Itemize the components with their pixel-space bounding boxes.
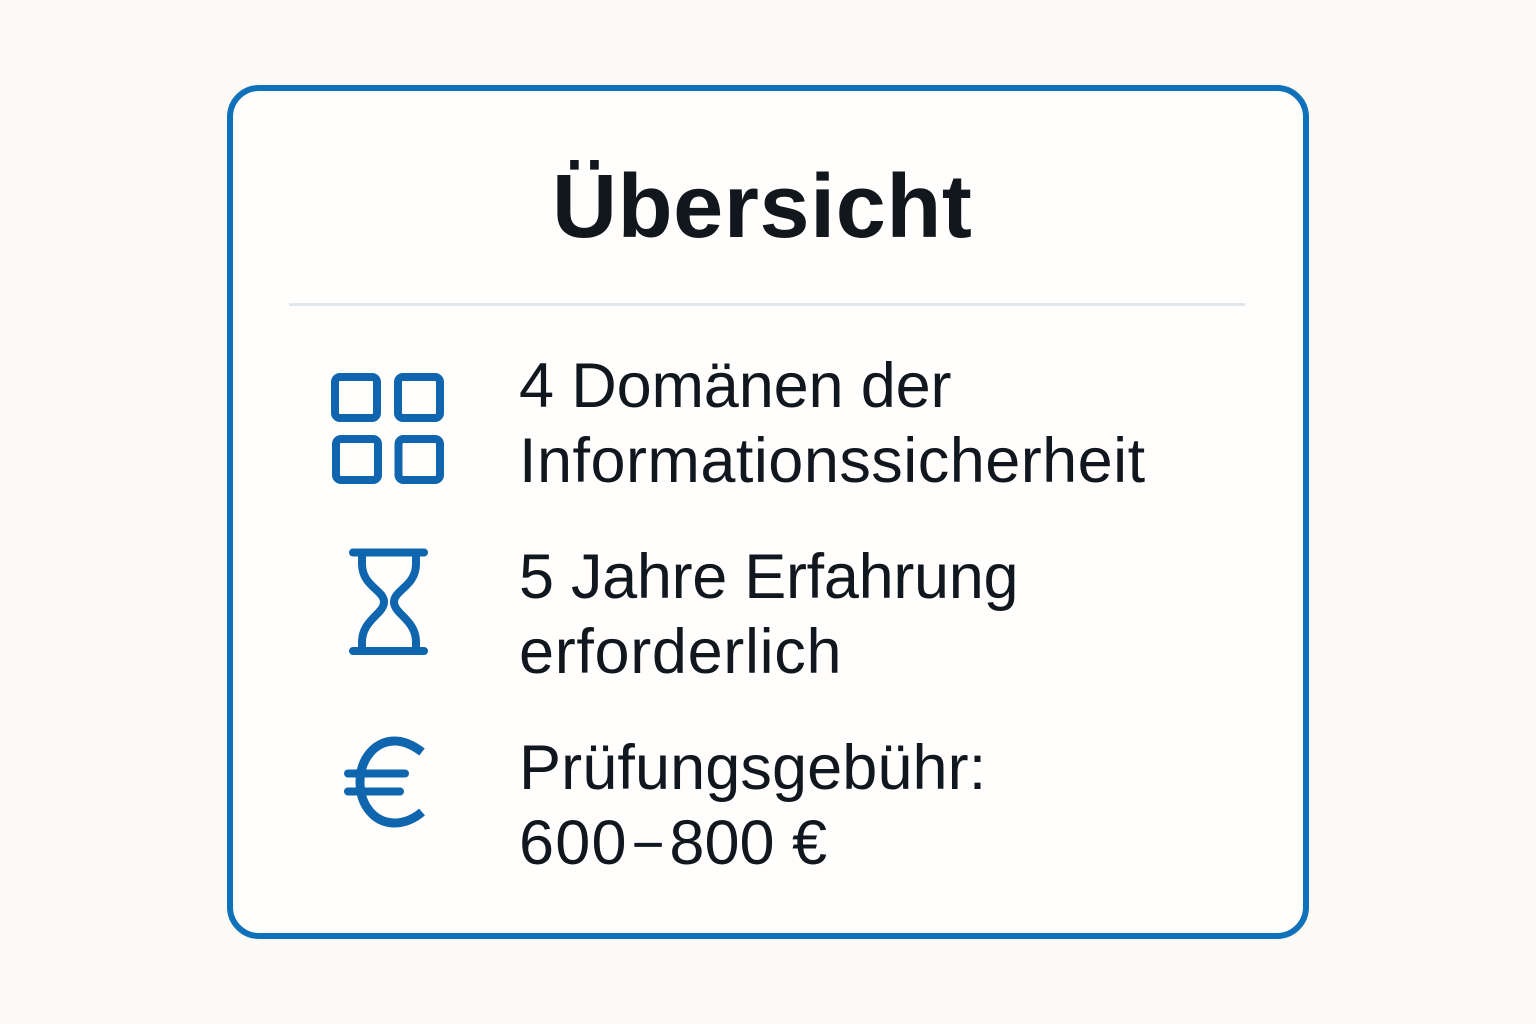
text: experience: 5 Jahre Erfahrung — [519, 542, 1018, 612]
text: exam fee — [519, 733, 986, 878]
title: Übersicht — [552, 157, 973, 257]
text: domains — [519, 351, 1146, 496]
text: experience — [519, 542, 1018, 686]
text: domains: Informationssicherheit — [519, 426, 1146, 496]
text: exam fee: Prüfungsgebühr: — [519, 733, 986, 803]
text: domains: 4 Domänen der — [519, 351, 951, 421]
panel: overview card — [227, 85, 1309, 939]
text: exam fee: 600–800 € — [519, 808, 827, 878]
text: experience: erforderlich — [519, 616, 842, 686]
